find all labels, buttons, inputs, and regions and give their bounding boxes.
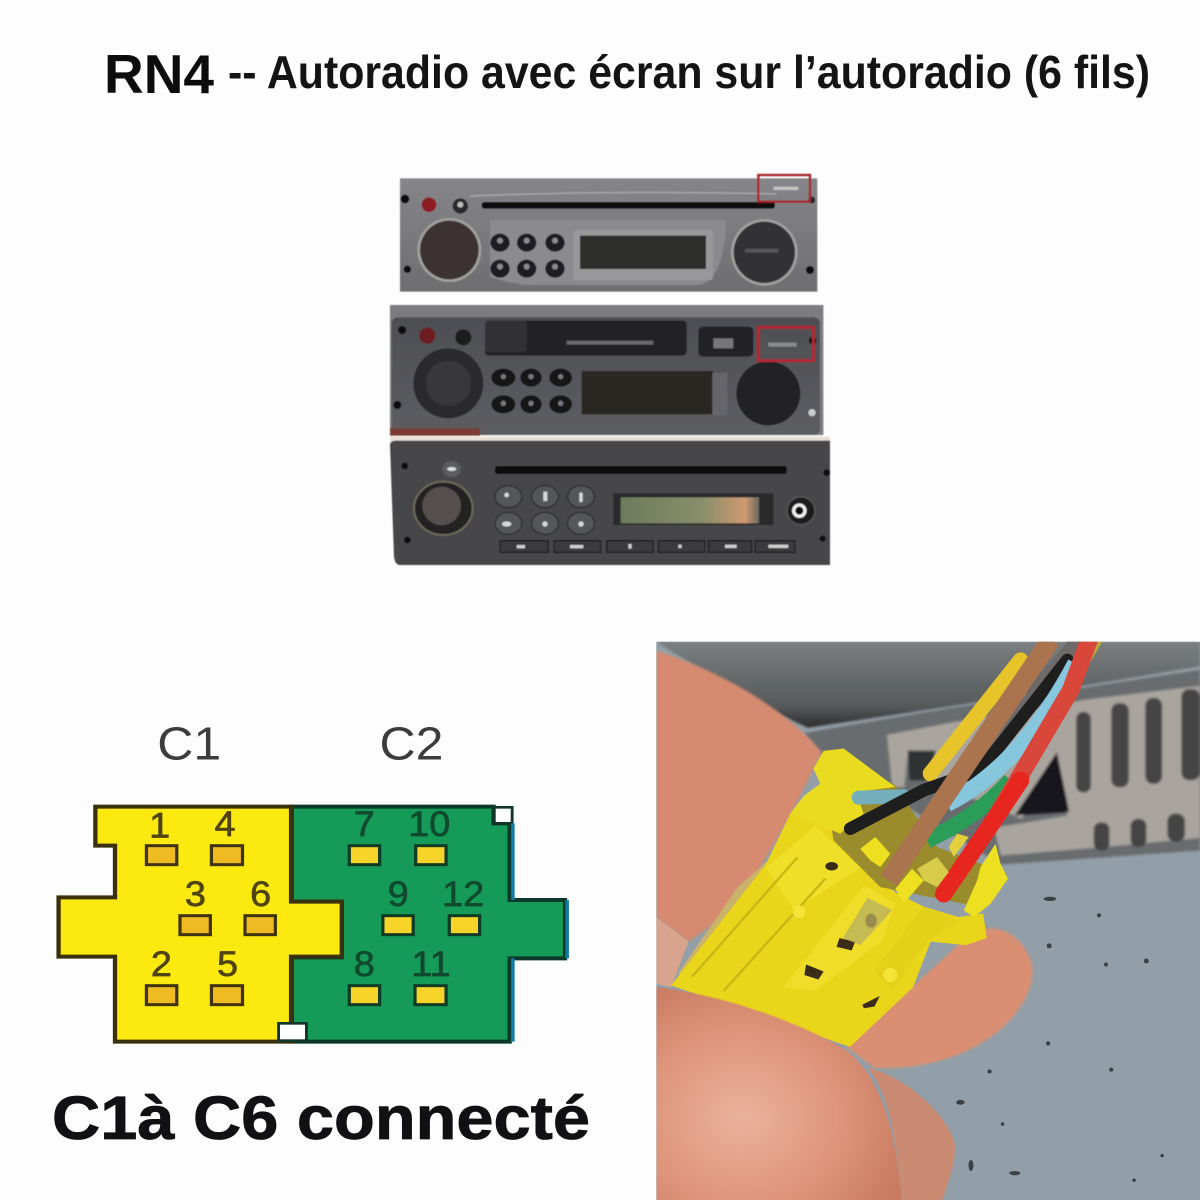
title text: -- Autoradio avec écran sur l’autoradio (6 fils) <box>228 46 1150 98</box>
C2 pin numbers: 11 <box>411 944 451 984</box>
connector terminal windows <box>804 862 880 1008</box>
radio 2: cassette with screen <box>390 305 823 436</box>
C1 pin numbers: 2 <box>151 944 172 984</box>
photo background surfaces <box>650 640 1200 1200</box>
blue wire <box>947 663 1076 804</box>
C2 pin numbers: 12 <box>442 874 484 914</box>
C1 pin slots <box>146 846 275 1005</box>
green wire <box>927 780 1011 840</box>
yellow connector body <box>671 814 987 1047</box>
blue wire left stub <box>859 796 904 798</box>
C2 pin numbers: 9 <box>388 874 409 914</box>
C2 pin numbers: 7 <box>354 804 375 844</box>
C1 pin numbers: 4 <box>214 804 236 844</box>
black wire <box>850 660 1067 829</box>
radio photos stack <box>390 175 830 565</box>
brown wire <box>889 640 1051 880</box>
C2 pin slots <box>349 846 480 1005</box>
connector diagram <box>59 718 567 1042</box>
C2 pin numbers: 10 <box>408 804 450 844</box>
red wire lower <box>944 780 1021 894</box>
C2 pin numbers: 8 <box>354 944 375 984</box>
photo: hand holding yellow connector with wires <box>650 640 1200 1200</box>
back fingers <box>656 651 1033 1068</box>
vent grille <box>887 686 1200 856</box>
front thumb <box>656 987 903 1200</box>
title label RN4: RN4 <box>104 43 214 105</box>
radio 1: CD with screen <box>400 175 817 292</box>
grey wire <box>984 640 1077 760</box>
front posts <box>860 834 1008 917</box>
C1 pin numbers: 6 <box>250 874 271 914</box>
label C2: C2 <box>379 718 443 770</box>
label C1: C1 <box>157 718 221 770</box>
C1 pin numbers: 5 <box>217 944 238 984</box>
olive wire <box>1090 642 1102 664</box>
thumb side and nail <box>867 1068 955 1200</box>
wires bundle <box>850 640 1097 894</box>
blue edge highlight <box>513 823 567 1042</box>
caption: C1à C6 connecté <box>52 1084 590 1152</box>
connector C1 yellow half <box>59 807 342 1042</box>
connector rear walls <box>790 749 895 834</box>
dust specks <box>956 897 1164 1182</box>
C1 pin numbers: 1 <box>149 805 170 845</box>
title <box>104 43 1150 105</box>
yellow wire <box>930 660 1021 774</box>
C1 pin numbers: 3 <box>185 874 206 914</box>
red wire upper <box>994 640 1089 820</box>
C2 pin numbers <box>354 804 484 984</box>
C1 pin numbers <box>149 804 271 984</box>
keying notches <box>279 807 512 1041</box>
connector C2 green half <box>292 807 565 1042</box>
connector cavity <box>824 780 1007 907</box>
radio 3: CD with colour screen and jack <box>390 437 830 565</box>
connector top, wires and posts <box>790 640 1097 917</box>
